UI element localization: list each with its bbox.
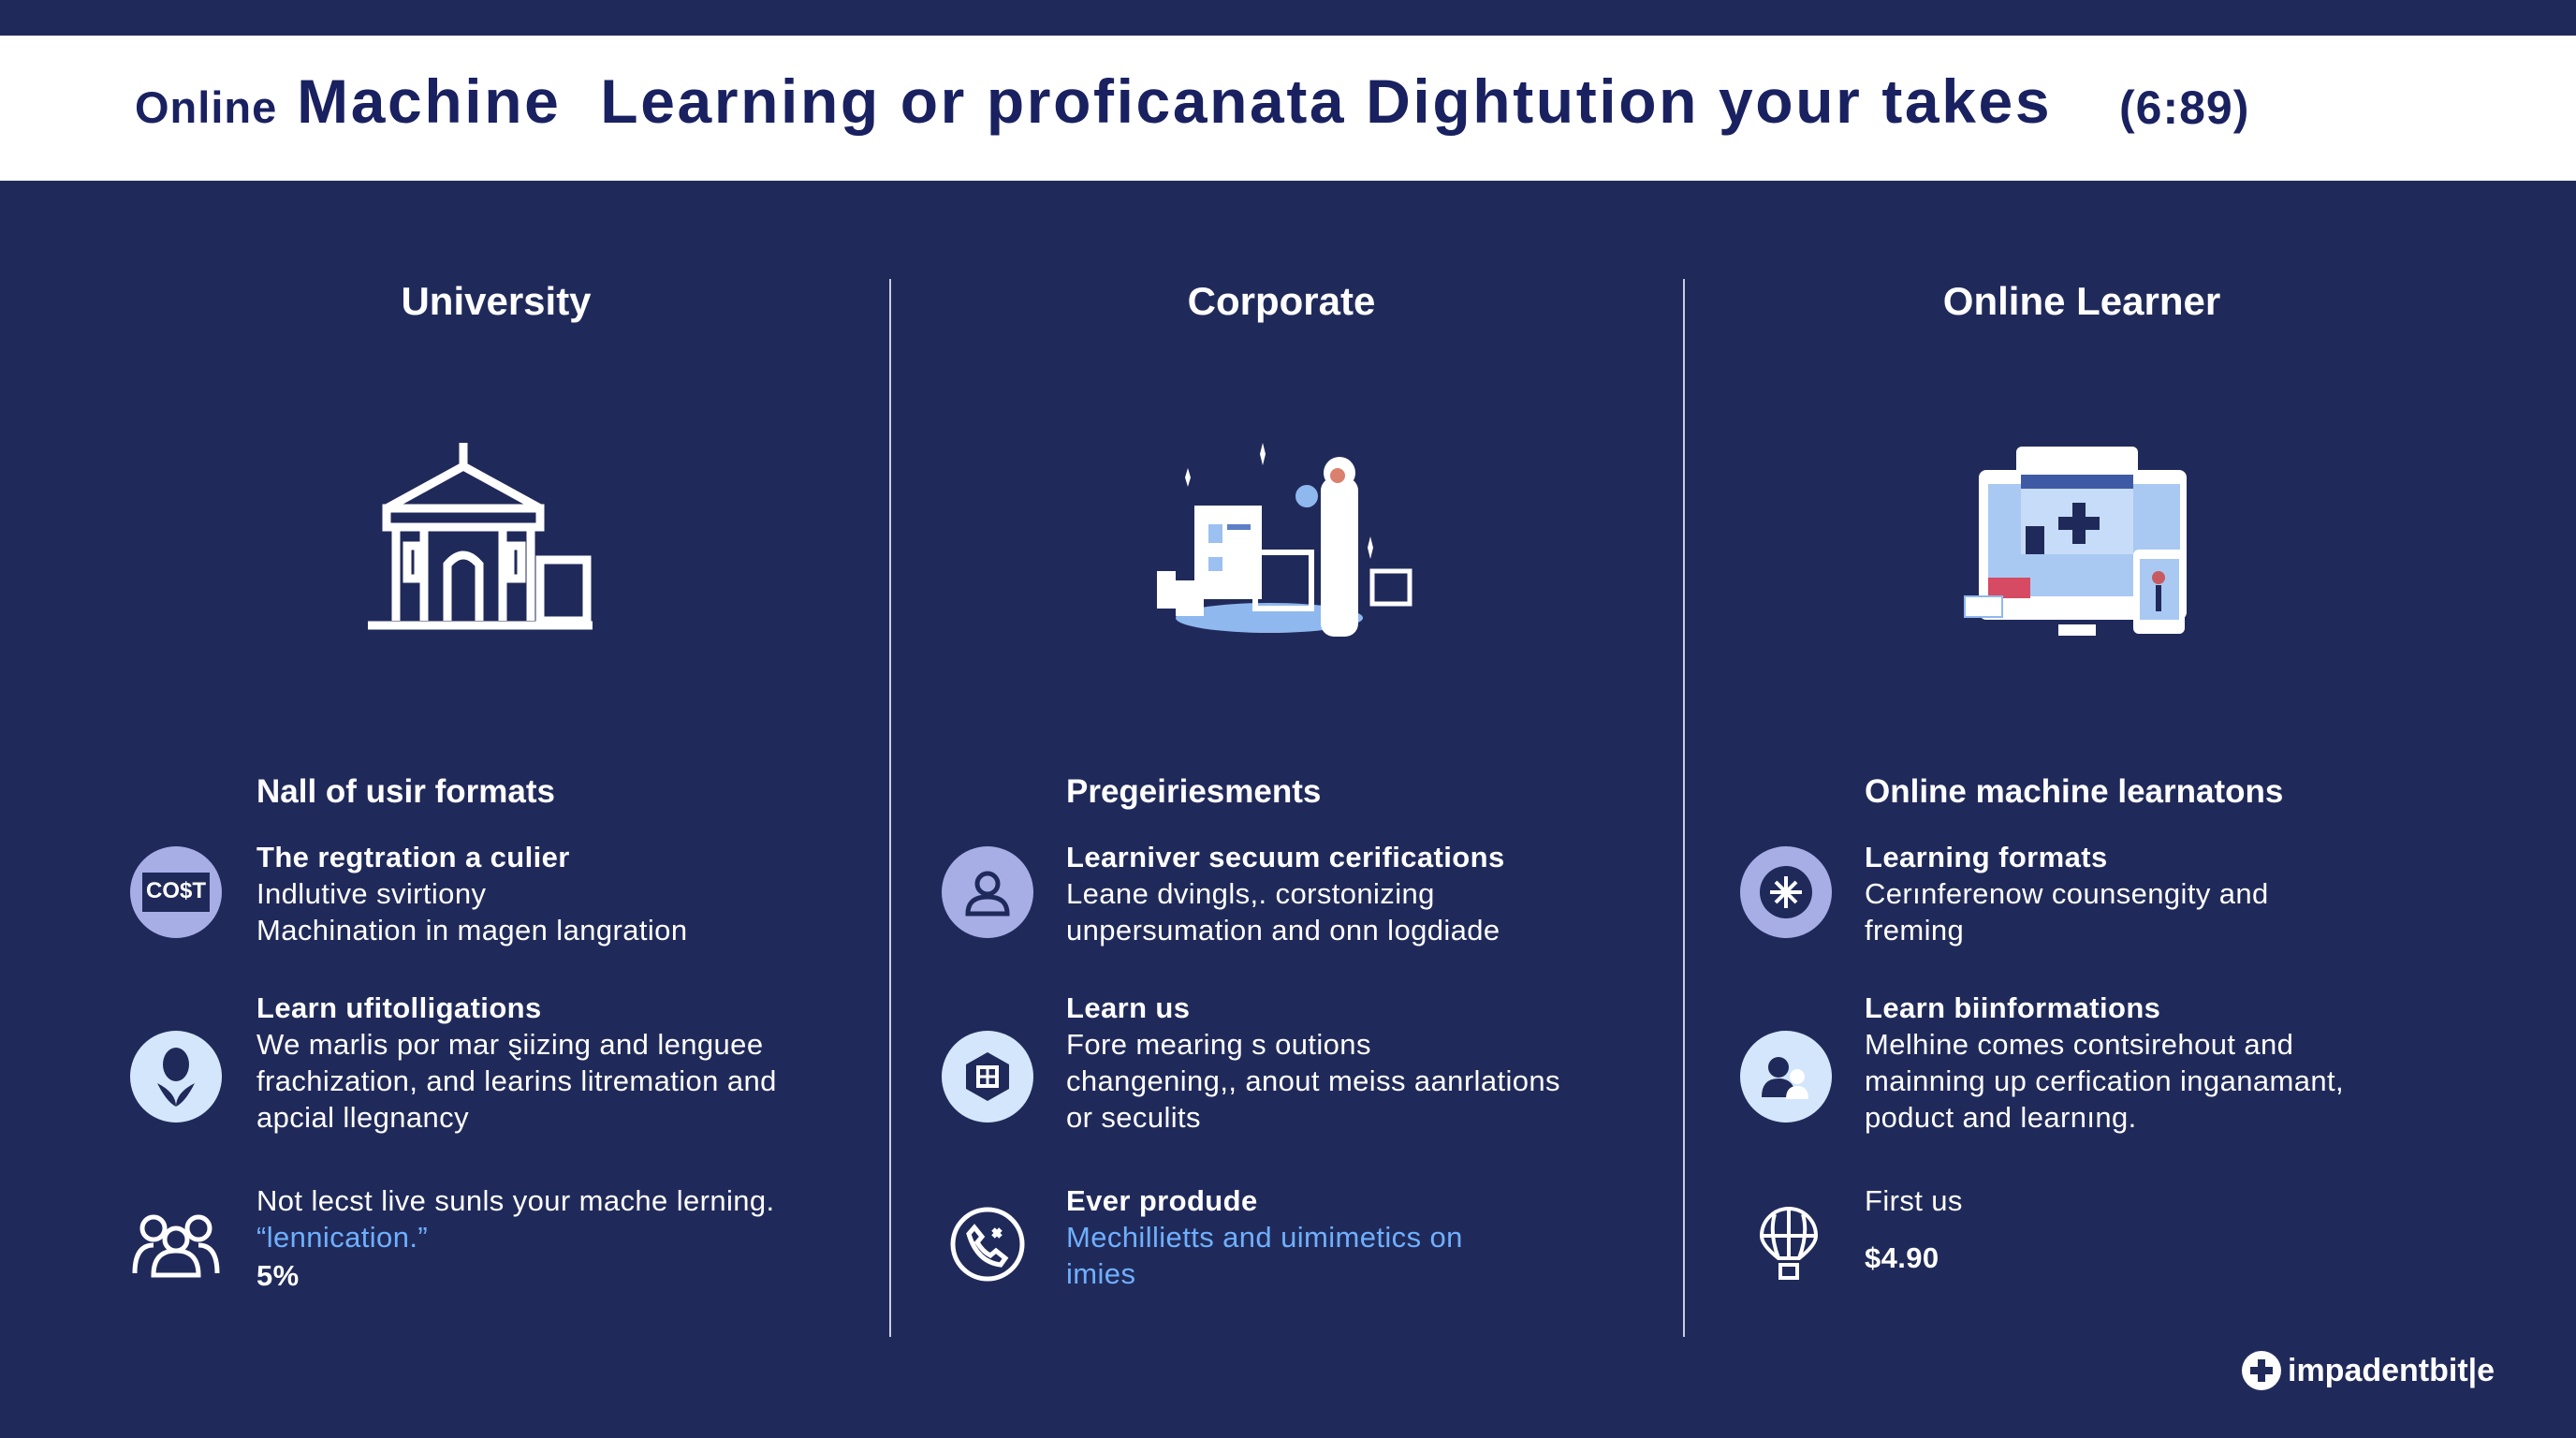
icon: hexagon [942, 1031, 1033, 1123]
item: learn us: changening,, anout meiss aanrlations [1066, 1064, 1560, 1097]
icon: cost: CO$T [146, 878, 206, 903]
item: ever produde [1066, 1184, 1463, 1290]
item: learning formats [1865, 841, 2269, 946]
logo: impadentbit|e [2288, 1352, 2495, 1387]
item: learn biinformations: poduct and learnıng. [1865, 1101, 2137, 1134]
item: not lecst: “lennication.” [256, 1221, 428, 1254]
item: learn us: or seculits [1066, 1101, 1201, 1134]
item: learn ufitolligations: We marlis por mar ȿiizing and lenguee [256, 1028, 763, 1061]
item: not lecst [256, 1184, 775, 1292]
item: learniver: unpersumation and onn logdiade [1066, 914, 1500, 946]
item: learning formats: Learning formats [1865, 841, 2108, 873]
item: learn ufitolligations [256, 991, 777, 1134]
title: Online Machine Learning or proficanata Dightution your takes [135, 66, 2052, 136]
item: learn us: Learn us [1066, 991, 1190, 1024]
item: not lecst: 5% [256, 1259, 300, 1292]
item: ever produde: imies [1066, 1257, 1135, 1290]
heading: University: University [401, 279, 592, 323]
item: learniver: Learniver secuum cerifications [1066, 841, 1505, 873]
item: regtration: Indlutive svirtiony [256, 877, 486, 910]
item: learn us [1066, 991, 1560, 1134]
item: ever produde: Mechillietts and uimimetics on [1066, 1221, 1463, 1254]
item: not lecst: Not lecst live sunls your mache lerning. [256, 1184, 775, 1217]
item: first us: First us [1865, 1184, 1963, 1217]
item: first us [1865, 1184, 1963, 1274]
item: learning formats: freming [1865, 914, 1964, 946]
section heading: Corporate: Pregeiriesments [1066, 773, 1321, 810]
heading: Corporate: Corporate [1188, 279, 1375, 323]
item: learn biinformations: mainning up cerfication inganamant, [1865, 1064, 2344, 1097]
icon: balloon [1760, 1207, 1818, 1280]
icon: group [133, 1215, 219, 1277]
icon: corporate scene [1157, 443, 1412, 637]
header band [0, 36, 2576, 181]
icon: cost [130, 846, 222, 938]
item: learn ufitolligations: Learn ufitolligations [256, 991, 542, 1024]
item: learn ufitolligations: frachization, and learins litremation and [256, 1064, 777, 1097]
item: learn biinformations: Learn biinformations [1865, 991, 2160, 1024]
item: regtration: The regtration a culier [256, 841, 570, 873]
item: first us: $4.90 [1865, 1241, 1939, 1274]
item: learniver: Leane dvingls,. corstonizing [1066, 877, 1435, 910]
item: ever produde: Ever produde [1066, 1184, 1258, 1217]
item: learniver [1066, 841, 1505, 946]
icon: online devices [1964, 447, 2187, 636]
item: regtration: Machination in magen langration [256, 914, 687, 946]
item: learn us: Fore mearing s outions [1066, 1028, 1371, 1061]
icon: phone [951, 1208, 1024, 1281]
icon: person [130, 1031, 222, 1123]
title number: (6:89) [2119, 81, 2249, 134]
item: learn biinformations [1865, 991, 2344, 1134]
item: regtration [256, 841, 687, 946]
icon: people [1740, 1031, 1832, 1123]
icon: university building [368, 443, 593, 629]
item: learn biinformations: Melhine comes contsirehout and [1865, 1028, 2293, 1061]
section heading: Online: Online machine learnatons [1865, 773, 2283, 810]
heading: Online Learner: Online Learner [1943, 279, 2220, 323]
item: learning formats: Cerınferenow counsengity and [1865, 877, 2269, 910]
icon: user circle [942, 846, 1033, 938]
section heading: University: Nall of usir formats [256, 773, 555, 810]
item: learn ufitolligations: apcial llegnancy [256, 1101, 469, 1134]
icon: gear brain [1740, 846, 1832, 938]
